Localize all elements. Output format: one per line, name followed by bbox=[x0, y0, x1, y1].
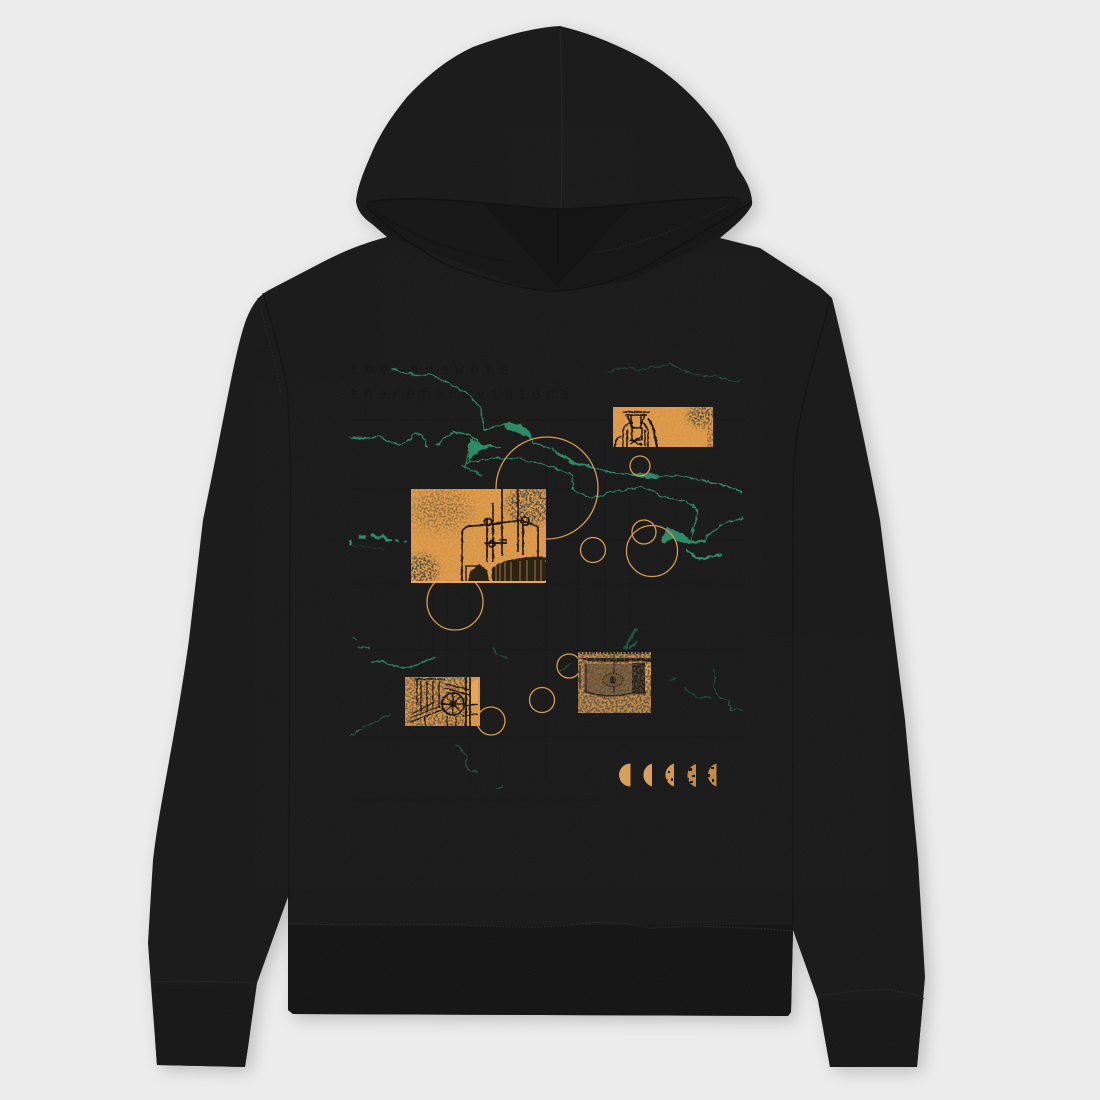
river: top right bbox=[607, 364, 740, 382]
river: upper main bbox=[392, 368, 742, 493]
moon phases bbox=[619, 764, 716, 787]
river: lower centre bbox=[455, 648, 507, 790]
fabric shading bbox=[155, 932, 923, 1067]
moon 4 bbox=[687, 764, 696, 787]
panel: still and pipes engraving bbox=[411, 489, 546, 583]
small tank bbox=[468, 564, 489, 581]
hood seams bbox=[366, 27, 752, 292]
print: faint slogan text: the answers bbox=[350, 362, 515, 379]
river: left branch bbox=[350, 432, 500, 447]
moon 5 bbox=[708, 764, 716, 786]
panel: top right engraving bbox=[613, 407, 713, 447]
panel: furnace engraving bbox=[578, 652, 651, 713]
shoulder and sleeve seams bbox=[258, 293, 830, 925]
moon 3 bbox=[665, 764, 674, 786]
moon 1 bbox=[619, 764, 630, 786]
river: middle loop bbox=[467, 458, 743, 540]
hoodie silhouette bbox=[148, 26, 925, 1067]
hood inner opening bbox=[365, 197, 750, 292]
river: side branches bbox=[462, 437, 482, 476]
moon 2 bbox=[643, 764, 652, 786]
river: left dashes bbox=[350, 535, 406, 545]
river: delta bbox=[668, 534, 720, 559]
furnace grain bbox=[578, 652, 651, 713]
boiler bbox=[492, 557, 546, 583]
moon specks bbox=[666, 767, 714, 783]
print: faint slogan text: thereforevisions bbox=[350, 387, 574, 404]
print: faint slogan text bbox=[350, 362, 574, 404]
neck opening bbox=[483, 204, 633, 286]
river: lower left bbox=[373, 657, 435, 667]
print: green river lines bbox=[350, 364, 743, 790]
pipes bbox=[462, 489, 538, 581]
rib seams bbox=[151, 922, 924, 999]
grain bbox=[411, 489, 546, 583]
print: faint grid bbox=[350, 420, 746, 800]
hoodie garment bbox=[140, 20, 940, 1080]
river blobs bbox=[468, 421, 708, 544]
river: thick sections bbox=[556, 452, 658, 477]
hoodie shadow bbox=[153, 31, 930, 1072]
river: small blob over boiler bbox=[625, 630, 636, 648]
panel: gear machine engraving bbox=[405, 677, 480, 726]
print: orange circles bbox=[427, 437, 678, 735]
river: lower right bbox=[669, 670, 742, 710]
